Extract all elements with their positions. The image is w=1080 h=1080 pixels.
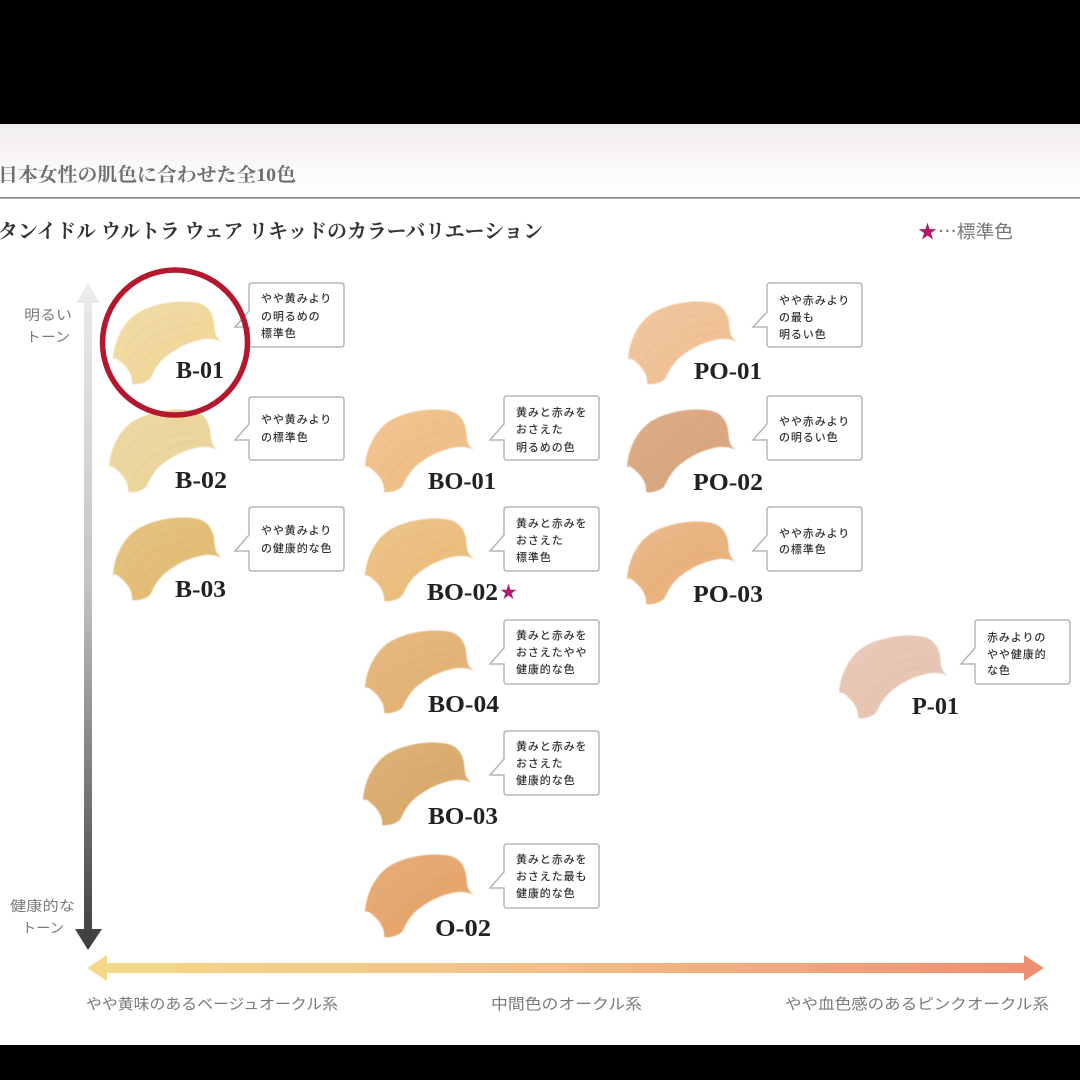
horizontal colour axis: やや血色感のあるピンクオークル系 <box>785 996 1049 1013</box>
description callout <box>961 620 1070 684</box>
code label: PO-01 <box>694 359 762 385</box>
swatch <box>363 743 472 825</box>
code label: BO-01 <box>428 469 496 495</box>
code label: PO-03 <box>693 582 763 608</box>
description callout <box>235 397 344 460</box>
description callout <box>490 844 599 908</box>
description callout: おさえたやや <box>516 646 587 659</box>
description callout: 黄みと赤みを <box>516 405 587 419</box>
description callout: やや赤みより <box>779 527 850 540</box>
description callout: の明るい色 <box>779 430 838 444</box>
description callout: の標準色 <box>779 542 827 556</box>
description callout <box>753 283 862 347</box>
swatch <box>109 410 218 492</box>
description callout: 健康的な色 <box>516 662 576 676</box>
shade B-02 <box>109 397 344 494</box>
shade BO-03 <box>363 731 599 830</box>
description callout: おさえた最も <box>516 870 587 883</box>
icon: standard colour star: ★ <box>500 583 517 602</box>
description callout: おさえた <box>516 534 564 547</box>
shade P-01 <box>839 620 1070 720</box>
swatch <box>628 302 737 384</box>
description callout <box>753 396 862 460</box>
red highlight circle around B-01 <box>102 270 248 415</box>
description callout <box>490 731 599 795</box>
description callout: やや赤みより <box>779 415 850 428</box>
code label: BO-03 <box>428 804 498 830</box>
code label: O-02 <box>435 916 491 942</box>
description callout: おさえた <box>516 423 564 436</box>
description callout: の最も <box>779 311 815 324</box>
description callout <box>490 396 599 460</box>
shade PO-03 <box>627 507 862 608</box>
swatch <box>113 518 222 600</box>
vertical tone axis <box>10 283 102 950</box>
description callout <box>235 507 344 571</box>
description callout: 健康的な色 <box>516 773 576 787</box>
code label: P-01 <box>912 694 959 720</box>
description callout: 黄みと赤みを <box>516 628 587 642</box>
description callout: 標準色 <box>516 550 552 564</box>
legend: standard colour: ★ <box>918 222 937 243</box>
description callout: 黄みと赤みを <box>516 516 587 530</box>
swatch <box>839 636 948 718</box>
heading: 日本女性の肌色に合わせた全10色 <box>0 164 296 186</box>
description callout: の健康的な色 <box>261 541 332 555</box>
code label: PO-02 <box>693 470 763 496</box>
description callout: 明るめの色 <box>516 440 576 454</box>
swatch <box>365 519 474 601</box>
description callout: 標準色 <box>261 326 297 340</box>
description callout: やや健康的 <box>987 647 1046 661</box>
description callout: 赤みよりの <box>987 631 1046 644</box>
shade BO-02 <box>365 507 599 606</box>
vertical tone axis: 明るい <box>24 307 72 323</box>
description callout: の明るめの <box>261 310 320 323</box>
shade B-01 <box>113 283 344 384</box>
description callout: やや黄みより <box>261 523 332 537</box>
swatch <box>365 410 474 492</box>
code label: BO-02 <box>427 580 498 606</box>
description callout: おさえた <box>516 757 564 770</box>
description callout: 黄みと赤みを <box>516 739 587 753</box>
shade PO-02 <box>627 396 862 496</box>
vertical tone axis: トーン <box>22 920 64 936</box>
swatch <box>627 522 736 604</box>
legend: standard colour: …標準色 <box>938 218 1013 244</box>
swatch <box>365 855 474 937</box>
description callout: 健康的な色 <box>516 886 576 900</box>
description callout: やや黄みより <box>261 412 332 426</box>
code label: B-02 <box>175 468 227 494</box>
description callout: な色 <box>987 663 1011 677</box>
subtitle: タンイドル ウルトラ ウェア リキッドのカラーバリエーション <box>0 220 543 243</box>
description callout: の標準色 <box>261 430 309 444</box>
horizontal colour axis: やや黄味のあるベージュオークル系 <box>86 996 338 1013</box>
description callout: 黄みと赤みを <box>516 852 587 866</box>
description callout <box>490 507 599 571</box>
description callout: やや黄みより <box>261 291 332 305</box>
description callout <box>490 620 599 684</box>
shade BO-04 <box>365 620 599 718</box>
swatch <box>365 631 474 713</box>
horizontal colour axis <box>86 955 1049 1013</box>
description callout: やや赤みより <box>779 294 850 307</box>
vertical tone axis: 健康的な <box>10 898 75 914</box>
description callout <box>753 507 862 571</box>
horizontal colour axis: 中間色のオークル系 <box>491 996 642 1013</box>
swatch <box>113 302 222 384</box>
description callout <box>235 283 344 347</box>
shade B-03 <box>113 507 344 603</box>
header band <box>0 124 1080 197</box>
description callout: 明るい色 <box>779 327 827 341</box>
shade BO-01 <box>365 396 599 495</box>
code label: BO-04 <box>428 692 499 718</box>
vertical tone axis: トーン <box>26 329 70 345</box>
code label: B-01 <box>176 358 224 384</box>
shade PO-01 <box>628 283 862 385</box>
swatch <box>627 410 736 492</box>
code label: B-03 <box>175 577 226 603</box>
shade O-02 <box>365 844 599 942</box>
